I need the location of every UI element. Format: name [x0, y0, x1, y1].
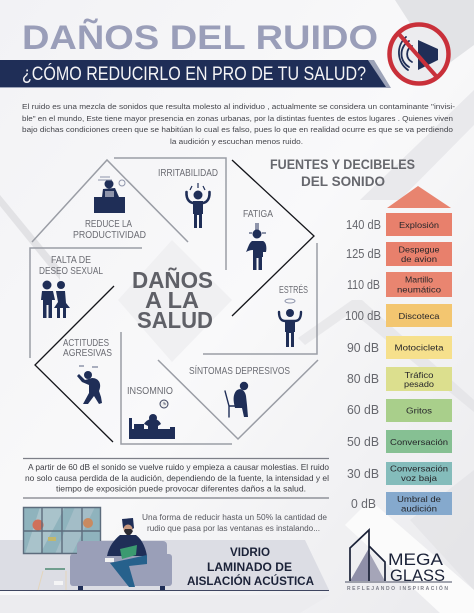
glass text: AISLACIÓN ACÚSTICA [187, 575, 314, 588]
warning paragraph: A partir de 60 dB el sonido se vuelve ruido y empieza a causar molestias. El ruido [28, 462, 329, 472]
row: 50 dB: Conversación [390, 437, 448, 447]
row: 50 dB [347, 430, 452, 453]
warning paragraph: tiempo de exposición puede provocar diferentes daños a la salud. [56, 484, 306, 494]
decibel heading [270, 157, 415, 189]
sofa [70, 541, 172, 590]
icon: tired person [246, 223, 266, 270]
row: 50 dB: 50 dB [347, 434, 379, 449]
row: 60 dB: Gritos [406, 406, 432, 416]
center heading: SALUD [137, 307, 213, 333]
row: 80 dB: pesado [404, 379, 434, 389]
row: 80 dB [347, 367, 452, 391]
man [105, 518, 147, 587]
panel: irritabilidad [114, 158, 226, 270]
intro text: la audición y escuchan menos ruido. [170, 137, 303, 146]
center heading [132, 266, 213, 333]
row: 0 dB: audición [401, 504, 437, 514]
row: 110 dB: neumático [397, 284, 441, 294]
row: 60 dB [347, 399, 452, 422]
intro text: bajo dichas condiciones creen que se habitúan lo cual es falso, pues lo que en realidad ocurre es que se va perdiendo [22, 125, 453, 134]
row: 80 dB: 80 dB [347, 371, 379, 386]
intro text: El ruido es una mezcla de sonidos que resulta molesto al individuo , actualmente se considera un contaminante "invisi- [22, 102, 456, 111]
health damage diagram [30, 158, 318, 444]
intro text: ble" en el mundo, Este tiene mayor presencia en zonas urbanas, por la distintas fuentes de estos lugares . Quienes viven [22, 114, 453, 123]
window [23, 507, 101, 554]
label: PRODUCTIVIDAD [73, 230, 146, 241]
row: 100 dB: 100 dB [345, 308, 381, 323]
arrow tip [387, 186, 451, 208]
row: 0 dB [351, 492, 452, 515]
logo: Mega Glass: GLASS [390, 566, 445, 585]
side table [38, 569, 66, 590]
warning paragraph [23, 458, 329, 498]
row: 90 dB [347, 336, 452, 359]
icon: seated person [225, 382, 248, 417]
center heading: A LA [145, 287, 199, 313]
panel: estres [203, 243, 317, 354]
decibel heading: DEL SONIDO [301, 174, 385, 189]
icon: person awake in bed [129, 400, 175, 439]
label: INSOMNIO [127, 386, 173, 397]
row: 140 dB: Explosión [399, 220, 439, 230]
row: 110 dB [347, 272, 452, 297]
label: FALTA DE [51, 255, 91, 266]
row: 125 dB: Despegue [398, 244, 440, 254]
row: 140 dB: 140 dB [346, 217, 381, 232]
icon: irritated person [186, 183, 210, 228]
glass text: rudio que pasa por las ventanas es instalando... [147, 524, 320, 533]
panel: falta de deseo sexual [30, 248, 142, 358]
row: 125 dB: de avion [401, 254, 437, 264]
label: REDUCE LA [85, 219, 132, 230]
row: 90 dB: Motocicleta [394, 342, 444, 352]
logo: Mega Glass: MEGA [388, 550, 444, 569]
decibel heading: FUENTES Y DECIBELES [270, 157, 415, 172]
label: DESEO SEXUAL [39, 266, 103, 277]
row: 125 dB: 125 dB [346, 246, 381, 261]
row: 110 dB: 110 dB [347, 277, 380, 292]
panel: fatiga [232, 160, 314, 316]
row: 100 dB: Discoteca [398, 311, 440, 321]
icon: aggressive person [77, 366, 102, 404]
icon: stressed person [279, 299, 301, 347]
panel: insomnio [121, 332, 232, 444]
panel: sintomas depresivos [158, 360, 318, 439]
row: 125 dB [346, 242, 452, 266]
glass text: LAMINADO DE [207, 562, 292, 574]
label: ACTITUDES [63, 338, 109, 349]
center heading: DAÑOS [132, 266, 213, 293]
title: DAÑOS DEL RUIDO [22, 18, 378, 57]
row: 30 dB: voz baja [401, 473, 437, 483]
icon: desk worker [94, 177, 125, 213]
illustration: man on sofa by window [23, 507, 172, 590]
row: 80 dB: Tráfico [404, 370, 434, 380]
row: 90 dB: 90 dB [347, 340, 379, 355]
logo: Mega Glass: REFLEJANDO INSPIRACIÓN [347, 584, 448, 592]
subtitle banner: ¿CÓMO REDUCIRLO EN PRO DE TU SALUD? [22, 62, 366, 85]
row: 0 dB: Umbral de [397, 494, 441, 504]
label: ESTRÉS [279, 285, 308, 296]
row: 110 dB: Martillo [405, 274, 433, 284]
warning paragraph: no solo causa perdida de la audición, dependiendo de la fuente, la intensidad y el [25, 473, 329, 483]
row: 30 dB: 30 dB [347, 466, 379, 481]
row: 30 dB: Conversación [390, 464, 448, 474]
subtitle banner [0, 60, 391, 88]
glass banner [0, 540, 329, 590]
row: 140 dB [346, 213, 452, 236]
icon: no noise sign [390, 24, 448, 84]
panel: actitudes agresivas [35, 286, 114, 442]
row: 60 dB: 60 dB [347, 402, 379, 417]
row: 100 dB [345, 304, 452, 327]
row: 30 dB [347, 462, 452, 485]
label: SÍNTOMAS DEPRESIVOS [189, 366, 290, 377]
label: IRRITABILIDAD [158, 168, 218, 179]
panel: reduce la productividad [32, 160, 188, 242]
icon: couple [41, 280, 70, 318]
glass text [142, 513, 328, 588]
decibel scale [345, 186, 452, 515]
glass text: VIDRIO [230, 547, 270, 559]
logo: Mega Glass [345, 530, 452, 592]
intro text [22, 102, 456, 146]
row: 0 dB: 0 dB [351, 496, 376, 511]
label: AGRESIVAS [63, 348, 112, 359]
glass text: Una forma de reducir hasta un 50% la cantidad de [142, 513, 328, 522]
label: FATIGA [243, 209, 273, 220]
